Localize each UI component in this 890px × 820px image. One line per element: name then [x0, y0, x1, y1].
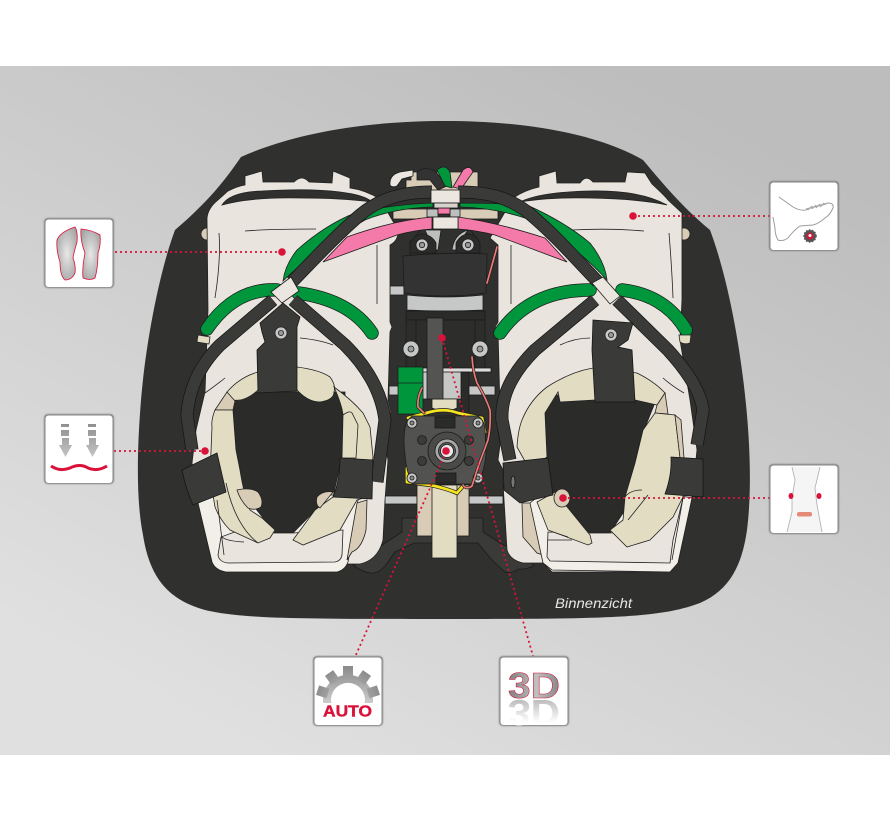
- screws: [403, 239, 488, 357]
- icon: foot with massage point: [769, 181, 839, 251]
- dotted leader lines: [114, 216, 770, 657]
- top centre clips: [431, 190, 460, 229]
- band screws: [275, 327, 617, 341]
- green end caps: [197, 335, 691, 344]
- icon: knee points: [769, 464, 839, 534]
- icon: 3D: 3D: [508, 692, 560, 733]
- left foot opening: [233, 392, 345, 533]
- left tan cushion: [347, 500, 367, 560]
- green arcs: [207, 290, 686, 333]
- left pads: [210, 367, 373, 545]
- straps and tubes: [182, 190, 703, 505]
- icon: 3D: [499, 656, 569, 733]
- left seat cushion: [192, 171, 398, 572]
- red wires: [418, 247, 497, 488]
- icon: AUTO gear: AUTO: [323, 704, 372, 720]
- icon: AUTO gear: [313, 656, 383, 726]
- icon: 3D: 3D: [508, 665, 560, 706]
- top bracket: [390, 167, 498, 219]
- left shell body: [192, 171, 398, 572]
- seat base: dark shell: [138, 121, 750, 619]
- caption: Binnenzicht: [555, 595, 633, 611]
- left tray: [198, 495, 358, 572]
- left side knob: [201, 228, 213, 240]
- green leaves: [283, 203, 607, 281]
- black tubes: [187, 192, 703, 482]
- right shell body: [490, 171, 697, 572]
- right lower details: [548, 490, 683, 560]
- icon: feet soles: [44, 218, 114, 288]
- side bands: [182, 453, 703, 505]
- right pads: [517, 368, 684, 547]
- motor housing: [385, 228, 503, 504]
- left inner tray: [218, 530, 343, 563]
- icon: pressure arrows on wave: [44, 414, 114, 484]
- right side knob: [678, 228, 690, 240]
- right tan cushion: [522, 503, 543, 555]
- left shell creases: [205, 229, 377, 393]
- callout dots: [201, 212, 637, 502]
- right inner tray: [547, 498, 683, 563]
- right top black slot: [520, 191, 667, 205]
- left top black slot: [222, 190, 372, 205]
- yellow wires: [407, 410, 485, 493]
- right shell creases: [511, 229, 684, 393]
- right seat cushion: [490, 171, 697, 572]
- central mechanism: [353, 167, 534, 573]
- right tray: [530, 495, 692, 572]
- lower bracket: [353, 485, 534, 573]
- left lower details: [217, 483, 258, 555]
- motor hub: [404, 416, 486, 484]
- pink tube: [323, 217, 567, 262]
- right vertical band: [592, 320, 635, 402]
- strap clips: [271, 277, 620, 304]
- right foot opening: [545, 395, 658, 533]
- left vertical band: [257, 303, 300, 393]
